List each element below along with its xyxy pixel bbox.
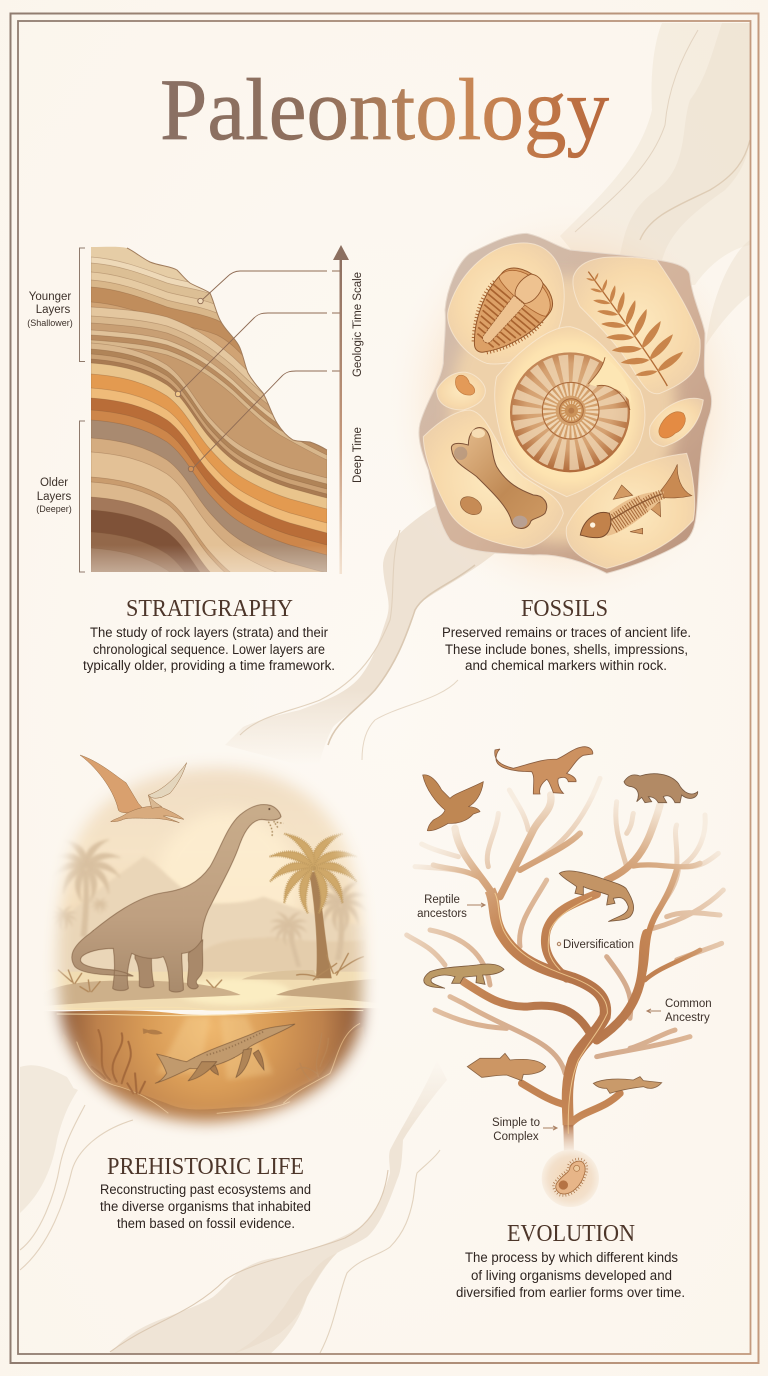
inner stone glow <box>450 277 677 543</box>
arrow: reptile ancestors <box>467 903 485 907</box>
label: simple to complex: Simple to <box>492 1117 540 1129</box>
text: prehistoric life description: Reconstructing past ecosystems and <box>100 1182 311 1197</box>
undersea <box>48 1008 374 1130</box>
label: simple to complex: Complex <box>493 1131 539 1143</box>
text: prehistoric life description: them based on fossil evidence. <box>117 1216 295 1231</box>
icon: near palm tree <box>267 826 359 978</box>
label: older layers: Layers <box>37 491 72 503</box>
stone cells <box>423 243 703 568</box>
icon: small fish <box>593 1077 662 1093</box>
label: reptile ancestors: ancestors <box>417 908 467 920</box>
icon: lobe-finned fish <box>467 1053 546 1081</box>
panel: fossil slab <box>385 200 755 610</box>
heading: fossils: FOSSILS <box>521 596 608 622</box>
heading: evolution: EVOLUTION <box>507 1221 635 1247</box>
stone slab <box>419 233 712 573</box>
light rays <box>157 1017 273 1080</box>
text: stratigraphy description: typically older, providing a time framework. <box>83 658 335 673</box>
icon: single cell origin <box>542 1150 599 1207</box>
islands <box>52 980 240 1005</box>
icon: mammal <box>624 774 698 803</box>
arrow: simple to complex <box>543 1126 557 1130</box>
label: Deep Time: Deep Time <box>352 427 364 483</box>
icon: long-neck dinosaur <box>72 805 283 992</box>
icon: fossil fish <box>580 464 692 538</box>
icon: marine reptile <box>155 1024 295 1083</box>
seabed <box>110 1079 316 1122</box>
label: simple to complex <box>492 1117 540 1143</box>
text: evolution description: of living organisms developed and <box>471 1268 672 1283</box>
small fish <box>143 1028 163 1035</box>
label: younger layers: Layers <box>36 304 71 316</box>
text: fossils description: and chemical markers within rock. <box>465 658 667 673</box>
text: fossils description <box>442 625 691 673</box>
text: evolution description: The process by which different kinds <box>465 1250 678 1265</box>
marker: diversification <box>557 942 561 946</box>
callout leader lines <box>175 271 340 472</box>
ferns <box>58 953 363 992</box>
bracket: younger layers <box>80 248 85 362</box>
text: fossils description: Preserved remains or traces of ancient life. <box>442 625 691 640</box>
text: fossils description: These include bones, shells, impressions, <box>445 642 688 657</box>
icon: bone <box>451 428 547 529</box>
label: younger layers: (Shallower) <box>27 318 73 328</box>
icon: pterosaur <box>80 755 187 823</box>
text: prehistoric life description: the diverse organisms that inhabited <box>100 1199 311 1214</box>
panel: prehistoric scene <box>37 747 380 1143</box>
label: common ancestry: Common <box>665 998 712 1010</box>
icon: trilobite <box>453 257 563 371</box>
text: evolution description: diversified from earlier forms over time. <box>456 1285 685 1300</box>
text: evolution description <box>456 1250 685 1300</box>
text: prehistoric life description <box>100 1182 311 1231</box>
text: stratigraphy description: chronological sequence. Lower layers are <box>93 642 325 657</box>
icon: upper lizard <box>559 871 634 922</box>
label: common ancestry: Ancestry <box>665 1012 710 1024</box>
label: diversification: Diversification <box>563 939 634 951</box>
arrow: common ancestry <box>647 1009 661 1013</box>
geologic time arrow <box>333 245 349 574</box>
hazy backdrop <box>57 839 361 972</box>
text: stratigraphy description: The study of rock layers (strata) and their <box>90 625 328 640</box>
rock layer cross-section <box>91 246 327 572</box>
bracket: older layers <box>80 421 85 572</box>
label: older layers <box>36 477 72 514</box>
title: Paleontology <box>160 62 609 159</box>
heading: stratigraphy: STRATIGRAPHY <box>126 596 293 622</box>
label: common ancestry <box>665 998 712 1024</box>
label: older layers: (Deeper) <box>36 504 72 514</box>
label: younger layers: Younger <box>29 291 71 303</box>
icon: bird <box>423 775 483 831</box>
fossils in stone (drawn in 3x coords) <box>419 233 712 573</box>
panel: evolution tree <box>407 747 723 1207</box>
panel: stratigraphy diagram <box>28 245 364 574</box>
pebble fossils <box>455 375 685 518</box>
sky <box>50 762 372 972</box>
heading: prehistoric life: PREHISTORIC LIFE <box>107 1154 304 1180</box>
label: Geologic Time Scale: Geologic Time Scale <box>352 272 364 377</box>
label: reptile ancestors <box>417 894 467 920</box>
icon: lower lizard <box>424 964 504 988</box>
icon: theropod dinosaur <box>495 747 593 794</box>
stone glow <box>385 200 755 610</box>
main trunk branches <box>490 890 647 1155</box>
water surface <box>65 972 362 1010</box>
label: older layers: Older <box>40 477 68 489</box>
seaweed <box>92 1030 145 1093</box>
sky glow <box>164 816 299 908</box>
text: stratigraphy description <box>83 625 335 673</box>
faded side branches <box>407 778 723 1073</box>
secondary branches <box>433 795 700 1123</box>
label: younger layers <box>27 291 73 328</box>
label: reptile ancestors: Reptile <box>424 894 460 906</box>
layer outline <box>127 248 327 450</box>
icon: ammonite <box>510 352 631 472</box>
icon: fern <box>586 272 687 386</box>
